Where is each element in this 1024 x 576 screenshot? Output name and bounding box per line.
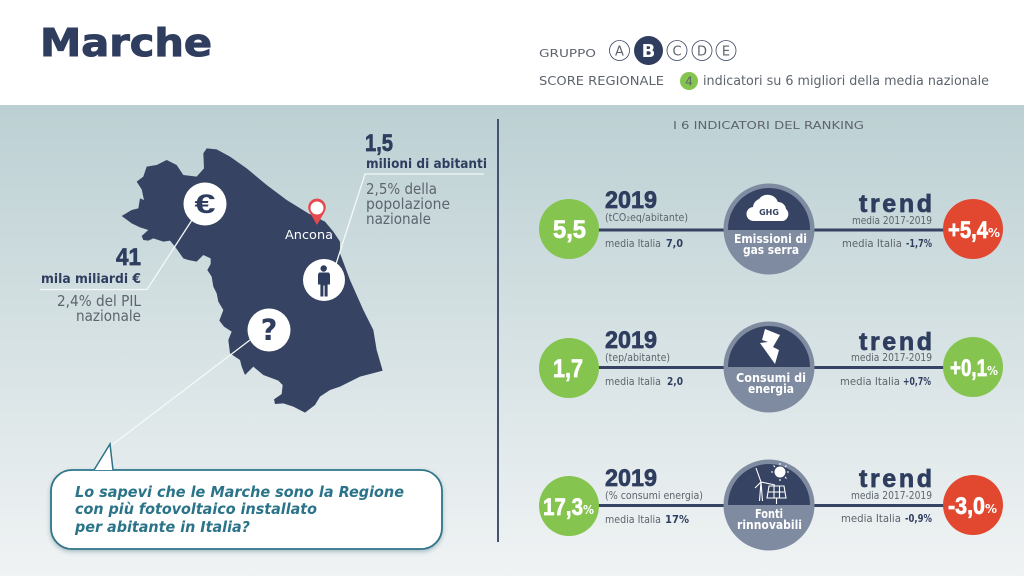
panel: greenhouse gas indicator: trend — [859, 190, 932, 218]
icon: GHG cloud — [746, 195, 788, 221]
text: GDP: mila miliardi € — [41, 271, 141, 287]
panel: renewable sources indicator: % — [985, 502, 997, 516]
panel: energy consumption indicator — [539, 322, 1003, 412]
panel: energy consumption indicator: (tep/abitante) — [605, 352, 670, 364]
label: Ancona: Ancona — [285, 227, 333, 242]
panel: renewable sources indicator: 17,3 — [543, 494, 583, 521]
icon: person — [303, 259, 345, 301]
panel: energy consumption indicator: Consumi di — [736, 371, 806, 385]
callout: Lo sapevi che le Marche sono la Regione — [75, 483, 404, 501]
panel: energy consumption indicator: media 2017-2019 — [851, 352, 932, 364]
panel: renewable sources indicator — [539, 460, 1003, 550]
regional score: SCORE REGIONALE — [539, 74, 664, 88]
panel: greenhouse gas indicator: +5,4 — [948, 217, 989, 244]
text: population: milioni di abitanti — [366, 156, 487, 172]
panel: energy consumption indicator: +0,1 — [950, 355, 987, 382]
text: population — [365, 130, 487, 228]
icon: question mark — [248, 308, 290, 352]
text: GDP: 41 — [116, 244, 141, 271]
panel: renewable sources indicator: rinnovabili — [737, 518, 802, 532]
callout: con più fotovoltaico installato — [75, 500, 317, 518]
callout — [51, 444, 442, 549]
panel: greenhouse gas indicator: Emissioni di — [734, 232, 807, 246]
panel: greenhouse gas indicator: (tCO₂eq/abitante) — [605, 212, 688, 224]
text: GDP: nazionale — [76, 307, 141, 325]
panel: renewable sources indicator: 2019 — [605, 465, 657, 492]
regional score: 4 — [685, 74, 693, 88]
panel: greenhouse gas indicator: media 2017-2019 — [852, 215, 932, 227]
panel: greenhouse gas indicator — [539, 184, 1003, 274]
panel: energy consumption indicator: +0,7% — [903, 376, 931, 388]
group selector: E — [722, 44, 730, 60]
panel: energy consumption indicator: 2019 — [605, 327, 657, 354]
icon: question mark: ? — [261, 313, 277, 347]
icon: GHG cloud: GHG — [759, 208, 779, 217]
panel: greenhouse gas indicator: 7,0 — [666, 238, 683, 250]
panel: greenhouse gas indicator: 5,5 — [553, 216, 586, 244]
panel: renewable sources indicator: media 2017-2019 — [851, 490, 932, 502]
icon: Ancona pin — [308, 199, 326, 225]
panel: energy consumption indicator: media Italia — [605, 376, 661, 388]
panel: energy consumption indicator: media Italia — [840, 376, 900, 388]
panel: renewable sources indicator: media Italia — [841, 513, 901, 525]
group selector: B — [642, 41, 655, 62]
panel: energy consumption indicator: % — [987, 364, 998, 378]
panel: renewable sources indicator: % — [583, 503, 594, 517]
panel: renewable sources indicator: trend — [859, 465, 932, 493]
panel: greenhouse gas indicator: 2019 — [605, 187, 657, 214]
group selector: A — [615, 44, 624, 60]
panel: renewable sources indicator: (% consumi energia) — [605, 490, 703, 502]
text: population: popolazione — [366, 195, 450, 213]
map: Marche region — [122, 148, 383, 413]
group selector — [539, 36, 736, 65]
panel: energy consumption indicator: 2,0 — [667, 376, 683, 388]
icon: wind turbine and solar panel — [755, 463, 789, 504]
group selector: C — [672, 44, 682, 60]
icon: euro: € — [194, 189, 216, 219]
panel: energy consumption indicator: 1,7 — [553, 355, 583, 383]
text: GDP: 2,4% del PIL — [57, 292, 142, 310]
panel: greenhouse gas indicator: gas serra — [743, 243, 799, 257]
text: population: nazionale — [366, 210, 431, 228]
icon: lightning bolt — [760, 329, 780, 364]
panel: renewable sources indicator: media Italia — [605, 514, 661, 526]
panel: greenhouse gas indicator: media Italia — [605, 238, 661, 250]
panel: renewable sources indicator: Fonti — [755, 507, 783, 521]
text: population: 1,5 — [365, 130, 393, 157]
group selector: D — [697, 44, 707, 60]
panel: greenhouse gas indicator: % — [988, 226, 1000, 240]
callout: per abitante in Italia? — [74, 518, 250, 536]
panel: greenhouse gas indicator: -1,7% — [906, 238, 932, 250]
text: population: 2,5% della — [366, 180, 437, 198]
regional score: indicatori su 6 migliori della media nazionale — [703, 73, 989, 89]
heading: indicators: I 6 INDICATORI DEL RANKING — [673, 119, 864, 132]
panel: renewable sources indicator: -0,9% — [905, 513, 932, 525]
panel: energy consumption indicator: trend — [859, 328, 932, 356]
panel: renewable sources indicator: 17% — [665, 514, 689, 526]
title: Marche — [40, 21, 212, 65]
panel: energy consumption indicator: energia — [748, 382, 794, 396]
panel: greenhouse gas indicator: media Italia — [842, 238, 902, 250]
connector lines — [40, 174, 484, 445]
regional score — [539, 72, 989, 90]
group selector: GRUPPO — [539, 47, 596, 60]
panel: renewable sources indicator: -3,0 — [948, 493, 985, 520]
text: GDP — [41, 244, 142, 325]
divider — [497, 119, 499, 542]
icon: euro — [184, 182, 226, 226]
